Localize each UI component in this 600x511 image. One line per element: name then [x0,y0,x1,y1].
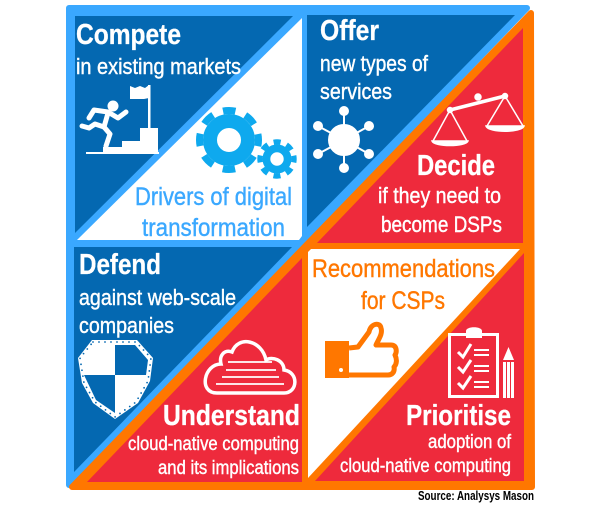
text: against web-scale: against web-scale [79,285,236,310]
panel: understand [87,258,302,482]
heading: transformation: transformation [142,214,285,242]
panel: drivers of digital transformation [77,18,302,242]
source note: Source: Analysys Mason [418,489,534,503]
panel background: drivers [77,18,302,240]
panel: defend [74,247,292,472]
text: cloud-native computing: cloud-native computing [128,434,299,455]
text: services: services [320,79,392,104]
icon: large gear [200,110,258,170]
panel: offer [307,15,515,227]
panel background: offer [307,15,515,227]
text: companies: companies [79,313,174,338]
panel: prioritise [315,253,524,481]
icon: small gear [260,142,294,176]
text: cloud-native computing: cloud-native computing [340,456,511,477]
heading: compete: Compete [76,19,181,51]
icon: thumbs up [325,324,396,378]
icon: shield [78,340,153,419]
heading: drivers of digital: Drivers of digital [135,183,292,211]
icon: cloud [205,342,295,393]
icon: pencil [503,347,514,398]
heading: prioritise: Prioritise [406,400,511,432]
heading: defend: Defend [79,249,161,281]
heading: offer: Offer [320,15,379,47]
panel background: compete [75,16,293,233]
icon: clipboard checklist [450,327,498,396]
panel background: prioritise [315,253,524,481]
text: and its implications: and its implications [158,458,299,479]
panel background: understand [87,258,302,482]
panel background: recommendations [308,249,520,478]
text: if they need to: if they need to [378,183,501,208]
panel background: decide [317,28,523,243]
text: become DSPs: become DSPs [381,212,502,237]
heading: recommendations: Recommendations [312,255,495,283]
orange frame [72,13,532,487]
icon: hub and nodes [314,107,373,172]
panel: recommendations for CSPs [308,249,520,478]
panel: decide [317,28,524,243]
text: new types of: new types of [320,51,429,76]
heading: for CSPs: for CSPs [361,287,445,315]
icon: runner climbing steps to flag [82,85,159,154]
panel background: defend [74,247,292,472]
blue frame [69,8,527,485]
heading: decide: Decide [417,150,495,182]
panel: compete [75,16,293,233]
text: in existing markets: in existing markets [76,54,241,79]
icon: scales [432,94,524,146]
heading: understand: Understand [163,400,300,432]
text: adoption of: adoption of [428,432,512,453]
